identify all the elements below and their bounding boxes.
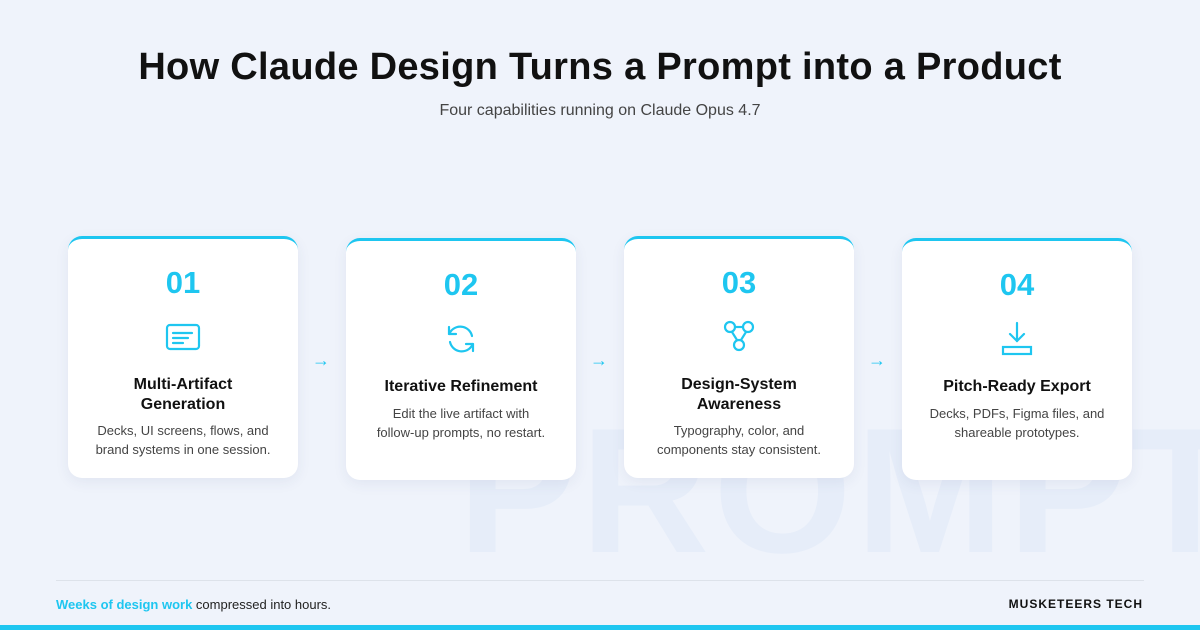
description [96,423,270,457]
card 1 [68,236,298,478]
description: shareable prototypes. [954,425,1080,440]
heading: Pitch-Ready Export [943,378,1091,395]
card 2 [346,238,576,480]
number 03: 03 [722,265,756,300]
description [930,406,1104,440]
icon: refresh [448,326,474,352]
card 4 [902,238,1132,480]
heading [134,376,232,413]
card 3 [624,236,854,478]
subtitle: Four capabilities running on Claude Opus 4.7 [439,102,761,119]
brand: MUSKETEERS TECH [1009,597,1143,611]
number 02: 02 [444,267,478,302]
heading: Iterative Refinement [385,378,537,395]
arrow 1: → [312,350,330,370]
heading [681,376,797,413]
number 04: 04 [1000,267,1034,302]
icon: download [1002,322,1032,356]
icon: nodes [724,320,754,352]
description: follow-up prompts, no restart. [377,425,545,440]
description [377,406,545,440]
description: components stay consistent. [657,442,821,457]
description: Edit the live artifact with [393,406,529,421]
heading: Generation [141,396,225,413]
footer tagline: Weeks of design work compressed into hours. [56,597,331,612]
description: Typography, color, and [674,423,804,438]
heading: Awareness [697,396,781,413]
icon: document [166,324,200,350]
description: brand systems in one session. [96,442,270,457]
description: Decks, PDFs, Figma files, and [930,406,1104,421]
description [657,423,821,457]
heading: Design-System [681,376,797,393]
heading: Multi-Artifact [134,376,232,393]
arrow 3: → [868,350,886,370]
title: How Claude Design Turns a Prompt into a Product [138,46,1062,88]
arrow 2: → [590,350,608,370]
number 01: 01 [166,265,200,300]
description: Decks, UI screens, flows, and [97,423,269,438]
